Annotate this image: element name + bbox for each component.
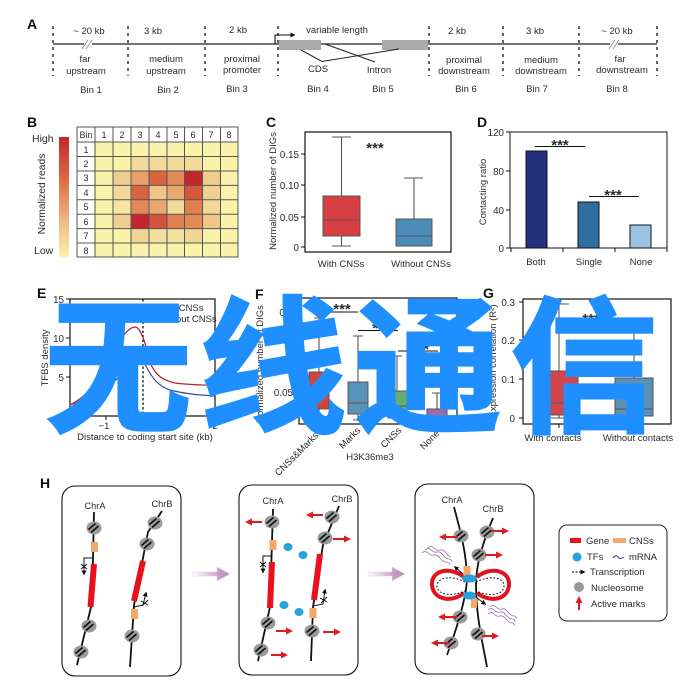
- panel D: bar chart: [477, 114, 667, 268]
- axis break marks: [82, 40, 619, 49]
- legend: TFs: TFs: [587, 552, 604, 563]
- table header labels: 2: [119, 130, 125, 140]
- region labels: upstream: [146, 66, 186, 77]
- colour scale labels: [32, 133, 54, 257]
- colour scale labels: High: [32, 133, 54, 145]
- legend: transcription: Transcription: [590, 567, 645, 578]
- ticks and values: [488, 128, 667, 255]
- chromosome labels: ChrA: [263, 496, 284, 506]
- bin labels: Bin 3: [226, 84, 248, 95]
- ticks and values: 0.3: [501, 298, 516, 309]
- region labels: Intron: [367, 65, 391, 76]
- bin labels: Bin 4: [307, 84, 329, 95]
- plot frame: [523, 299, 671, 424]
- axes: [510, 132, 667, 248]
- panel E: line chart: [37, 285, 218, 443]
- legend: gene: Gene: [586, 536, 609, 547]
- size labels: 3 kb: [526, 26, 544, 37]
- chromosome labels: [263, 494, 352, 506]
- table row labels: 6: [83, 217, 89, 227]
- ticks and values: 2: [212, 421, 218, 432]
- blocked transcription marks: [81, 558, 148, 607]
- table row labels: 7: [83, 231, 89, 241]
- significance brackets: [326, 301, 438, 358]
- blocked transcription marks: [260, 556, 327, 606]
- region labels: proximal: [224, 54, 260, 65]
- size labels: ~ 20 kb: [73, 26, 105, 37]
- ticks and values: 0.2: [501, 336, 515, 347]
- ticks and values: 0.15: [274, 335, 294, 346]
- significance brackets: *: [372, 320, 378, 337]
- rotated category labels: [273, 425, 442, 478]
- box: with contacts: [540, 304, 578, 418]
- plot frame: [305, 132, 451, 252]
- bin labels: Bin 5: [372, 84, 394, 95]
- y axis title: TFBS density: [40, 329, 51, 387]
- ticks and values: 5: [59, 373, 65, 384]
- CNS elements: [270, 540, 316, 618]
- chromosome labels: ChrA: [442, 495, 463, 505]
- active marks: [248, 515, 348, 655]
- arrow: stage 2 to 3: [368, 567, 405, 581]
- CDS and intron pointer lines: [301, 44, 399, 62]
- ticks and values: 120: [488, 128, 505, 139]
- plot frame: [299, 298, 457, 424]
- panel letter B: B: [27, 114, 37, 130]
- x labels: Without contacts: [603, 433, 673, 444]
- ticks and values: 80: [493, 167, 505, 178]
- table header labels: 8: [226, 130, 232, 140]
- x labels: [318, 259, 451, 270]
- significance brackets: ***: [333, 301, 351, 318]
- ticks and values: 0: [59, 412, 65, 423]
- significance stars: ***: [366, 140, 384, 157]
- x labels: [524, 433, 673, 444]
- box: without CNSs: [396, 178, 432, 246]
- x labels: With CNSs: [318, 259, 364, 270]
- y axis ticks and values: 0.10: [280, 181, 300, 192]
- colour scale labels: Normalized reads: [37, 154, 48, 234]
- nucleosomes: [74, 516, 162, 658]
- size labels: 2 kb: [448, 26, 466, 37]
- region labels: CDS: [308, 64, 328, 75]
- gene exon boxes: [279, 40, 428, 50]
- stage 2: activation: [239, 485, 358, 675]
- colour scale labels: Low: [34, 245, 54, 257]
- active marks: [434, 531, 506, 643]
- heat cells: [95, 142, 238, 257]
- x axis title: Distance to coding start site (kb): [77, 432, 213, 443]
- legend: Without CNSs: [157, 314, 217, 325]
- ticks and values: 0: [510, 414, 516, 425]
- chromosome labels: [85, 499, 172, 511]
- stage 3: contact: [415, 484, 534, 674]
- chromosome labels: ChrB: [483, 504, 503, 514]
- y axis title: Expression correlation (R²): [488, 305, 499, 417]
- legend: mRNA: mRNA: [629, 552, 658, 563]
- bin labels: Bin 7: [526, 84, 548, 95]
- chromosome B: [311, 506, 339, 661]
- stage 1: before contact: [62, 486, 181, 676]
- region labels: proximal: [446, 55, 482, 66]
- table header labels: Bin: [79, 130, 93, 140]
- size labels: 2 kb: [229, 25, 247, 36]
- y axis ticks and values: 0.05: [280, 213, 300, 224]
- region labels: far: [79, 54, 91, 65]
- chromosome labels: ChrB: [152, 499, 172, 509]
- transcription start arrow: [275, 35, 294, 44]
- ticks and values: [53, 295, 218, 432]
- x axis title: H3K36me3: [346, 452, 394, 463]
- x labels: Both: [526, 257, 546, 268]
- dashed transcription loops: [437, 578, 504, 594]
- table header labels: 1: [101, 130, 107, 140]
- bars: [526, 151, 651, 248]
- rotated category labels: None: [418, 428, 442, 452]
- panel H: model: [40, 475, 667, 676]
- legend: nucleosome: Nucleosome: [591, 583, 644, 594]
- size labels: [73, 25, 633, 37]
- box: marks: [348, 336, 368, 420]
- panel letter H: H: [40, 475, 50, 491]
- bin labels: [80, 84, 628, 96]
- panel letter E: E: [37, 285, 46, 301]
- table header labels: 4: [155, 130, 161, 140]
- chromosome labels: ChrA: [85, 501, 106, 511]
- box: none: [427, 393, 447, 419]
- table row labels: 2: [83, 159, 89, 169]
- chromosome labels: ChrB: [332, 494, 352, 504]
- y axis title: Normalized number of DIGs: [255, 305, 266, 423]
- panel letter G: G: [483, 285, 494, 301]
- box: CNSs and marks: [309, 318, 329, 420]
- ticks and values: 15: [53, 295, 65, 306]
- curve without CNSs: [70, 360, 215, 405]
- region labels: downstream: [438, 66, 490, 77]
- table header labels: 7: [208, 130, 214, 140]
- table row labels: 3: [83, 173, 89, 183]
- table row labels: 5: [83, 202, 89, 212]
- region labels: medium: [149, 54, 183, 65]
- chromosome A: [447, 507, 467, 655]
- ticks and values: 0.05: [274, 388, 294, 399]
- significance brackets: ***: [551, 137, 569, 154]
- rotated category labels: CNSs: [379, 425, 404, 451]
- chromosome labels: [442, 495, 503, 514]
- x labels: Single: [576, 257, 602, 268]
- transcription arrows: [455, 567, 485, 604]
- legend: active marks: Active marks: [591, 599, 646, 610]
- bin labels: Bin 1: [80, 85, 102, 96]
- region labels: [66, 54, 648, 77]
- x labels: Without CNSs: [391, 259, 451, 270]
- plot frame: [70, 299, 215, 416]
- ticks and values: 10: [53, 334, 65, 345]
- genes: [270, 554, 320, 608]
- panel letter A: A: [27, 16, 37, 32]
- rotated category labels: Marks: [337, 425, 363, 451]
- colour scale bar: [59, 137, 69, 257]
- y axis ticks and values: 0.15: [280, 150, 300, 161]
- panel letter D: D: [477, 114, 487, 130]
- CNS elements: [464, 566, 477, 608]
- box: CNSs: [388, 356, 407, 418]
- bin labels: Bin 8: [606, 84, 628, 95]
- significance stars: ***: [582, 311, 600, 328]
- significance brackets: *: [423, 341, 429, 358]
- box: with CNSs: [323, 137, 360, 246]
- table header labels: 6: [190, 130, 196, 140]
- ticks and values: −1: [99, 421, 109, 432]
- table row labels: 1: [83, 145, 89, 155]
- panel letter C: C: [266, 114, 276, 130]
- size labels: ~ 20 kb: [601, 26, 633, 37]
- region labels: promoter: [223, 65, 261, 76]
- red gene loops: [432, 571, 509, 599]
- y axis title: Normalized number of DIGs: [268, 132, 279, 250]
- region labels: downstream: [596, 65, 648, 76]
- table row labels: [83, 145, 89, 256]
- ticks and values: 0: [499, 244, 505, 255]
- nucleosomes: [444, 526, 494, 650]
- size labels: 3 kb: [144, 26, 162, 37]
- bin boundaries: [53, 26, 657, 76]
- curve with CNSs: [70, 327, 215, 405]
- panel A: genomic bins: [27, 16, 657, 96]
- CNS elements: [91, 542, 138, 619]
- region labels: medium: [524, 55, 558, 66]
- table header labels: 5: [173, 130, 179, 140]
- watermark: large blue title overlay: 无线通信: [44, 249, 658, 464]
- region labels: far: [614, 54, 626, 65]
- size labels: variable length: [306, 25, 368, 36]
- legend: [559, 525, 667, 621]
- chromosome A: [258, 509, 273, 661]
- genes: [90, 561, 143, 607]
- transcription factors: [462, 574, 477, 600]
- x labels: None: [630, 257, 652, 268]
- x labels: [526, 257, 652, 268]
- bin labels: Bin 2: [157, 85, 179, 96]
- panel G: box plot: [483, 285, 673, 444]
- x labels: With contacts: [524, 433, 582, 444]
- legend: [148, 303, 217, 325]
- table row labels: 4: [83, 188, 89, 198]
- region labels: upstream: [66, 66, 106, 77]
- ticks and values: [501, 298, 559, 428]
- ticks and values: [274, 308, 299, 399]
- ticks and values: 40: [493, 206, 505, 217]
- y axis ticks and values: 0: [294, 243, 300, 254]
- chromosome B: [476, 518, 493, 667]
- coding start line: [142, 299, 144, 416]
- y axis title: Contacting ratio: [478, 159, 489, 225]
- bin labels: Bin 6: [455, 84, 477, 95]
- legend: CNSs: CNSs: [629, 536, 654, 547]
- significance brackets: [535, 137, 639, 204]
- box: without contacts: [615, 320, 653, 418]
- transcription factors: [280, 543, 308, 616]
- ticks and values: 0.2: [279, 308, 293, 319]
- panel F: grouped box plot: [255, 286, 457, 478]
- region labels: downstream: [515, 66, 567, 77]
- rotated category labels: CNSs&Marks: [273, 430, 321, 478]
- panel letter F: F: [255, 286, 264, 302]
- table row labels: 8: [83, 246, 89, 256]
- significance brackets: ***: [604, 187, 622, 204]
- y axis ticks and values: [280, 150, 305, 254]
- chromosome B: [130, 511, 162, 667]
- ticks and values: 0.1: [279, 361, 293, 372]
- panel B: heatmap: [27, 114, 238, 257]
- arrow: stage 1 to 2: [193, 567, 230, 581]
- nucleosomes: [254, 510, 340, 656]
- table header labels: 3: [137, 130, 143, 140]
- panel C: box plot: [266, 114, 451, 270]
- genomic baseline: [53, 43, 657, 45]
- chromosome A: [77, 512, 94, 665]
- mRNA lower: [488, 606, 516, 626]
- table header labels: [79, 130, 232, 140]
- ticks and values: 0.1: [501, 375, 515, 386]
- mRNA upper: [422, 546, 452, 565]
- table grid: [77, 127, 238, 257]
- legend: With CNSs: [157, 303, 204, 314]
